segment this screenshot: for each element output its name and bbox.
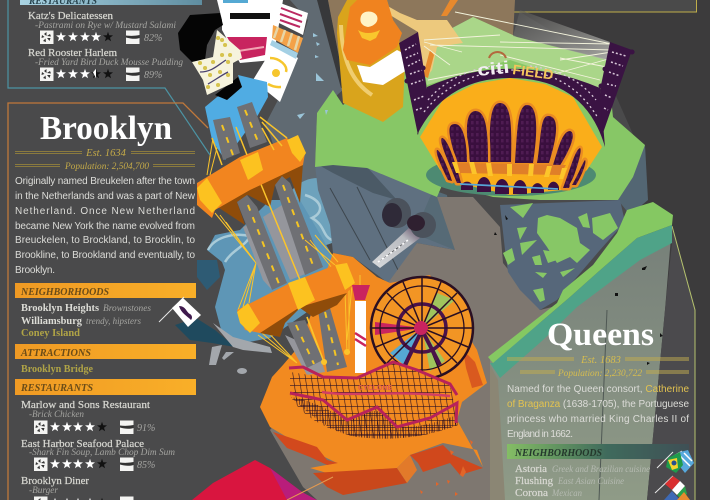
Queens history text: England in 1662. (507, 429, 573, 440)
icon: Mexico and other flags (664, 491, 690, 500)
Brooklyn history text: Originally named Breukelen after the town (15, 176, 195, 187)
illustration: orange figure with crown (343, 0, 407, 85)
neighborhoods list (515, 464, 650, 499)
Brooklyn history text: Brookline, to Brookland and eventually, to (15, 250, 195, 261)
icon: Italy flag (655, 476, 687, 499)
bridge upper tower (197, 135, 306, 218)
stadium roof band (417, 69, 605, 147)
stadium base (426, 154, 596, 196)
stadium right tower (600, 42, 632, 133)
illustration: rock speckles (494, 215, 663, 365)
illustration: blue-grey rock (315, 163, 455, 283)
Queens history text: Named for the Queen consort, Catherine (507, 384, 689, 395)
icon: Brazil and Greece flags (657, 450, 694, 473)
restaurant: Red Rooster Harlem (28, 48, 183, 81)
illustration: dark rock stripe (317, 0, 345, 88)
stadium facade (420, 78, 602, 195)
Queens history text (507, 384, 689, 440)
illustration: upper grey rock (265, 0, 345, 200)
stadium sign: citi (476, 58, 510, 80)
illustration: Citi Field stadium (399, 32, 632, 196)
illustration: Queens ridge teal (490, 225, 672, 378)
illustration: Cyclone roller coaster: CYCLONE (358, 385, 393, 392)
neighborhoods list: Flushing (515, 476, 554, 487)
illustration: green land mass (315, 17, 645, 200)
neighborhoods list: trendy, hipsters (86, 317, 141, 327)
section bar: neighborhoods (15, 283, 196, 298)
stadium arches (437, 103, 585, 188)
Queens history text: of Braganza (1638-1705), the Portuguese (507, 399, 689, 410)
illustration: Citi Field stadium: FIELD (512, 61, 554, 83)
illustration: Queens ridge green (488, 202, 673, 363)
restaurant: Brooklyn Diner (21, 476, 134, 500)
panel: Queens: NEIGHBORHOODS (514, 448, 602, 459)
neighborhoods list: Coney Island (21, 328, 80, 339)
panel: Queens (507, 317, 694, 500)
illustration: debris around coney island (420, 440, 473, 496)
attraction: Brooklyn Bridge: Brooklyn Bridge (21, 364, 93, 375)
Brooklyn history text (15, 176, 196, 276)
illustration: Queens lower ground (490, 225, 672, 500)
bridge middle roadway (237, 176, 323, 290)
Brooklyn history text: Brooklyn. (15, 265, 55, 276)
neighborhoods list: East Asian Cuisine (557, 477, 624, 487)
Queens history text: princess who married King Charles II of (507, 414, 689, 425)
panel: Brooklyn: RESTAURANTS (20, 383, 93, 394)
Queens title: Queens (547, 317, 654, 353)
illustration: red-pink hill (192, 460, 333, 500)
neighborhoods list: Mexican (551, 489, 582, 499)
restaurant: Red Rooster Harlem: -Fried Yard Bird Duck Mousse Pudding (35, 58, 183, 68)
illustration: orange cliff shadows (273, 350, 483, 495)
illustration: parachute jump tower (352, 275, 370, 373)
neighborhoods list: Brownstones (103, 304, 151, 314)
illustration: tan top land (328, 0, 515, 88)
illustration: Cyclone roller coaster (289, 362, 458, 439)
illustration: Queens tan sliver (490, 365, 505, 500)
illustration: figure with bearded face and papers (178, 0, 328, 165)
skyline roads (212, 102, 287, 165)
restaurant: Marlow and Sons: Marlow and Sons Restaurant (21, 400, 150, 411)
black hair (178, 13, 242, 100)
restaurant: East Harbor Seafood Palace: -Shark Fin Soup, Lamb Chop Dim Sum (29, 448, 175, 458)
illustration: cannon pipes (372, 198, 436, 268)
bridge lower roadway (285, 308, 347, 375)
neighborhoods list: Williamsburg (21, 316, 83, 327)
illustration: Queens dark side panel (647, 226, 695, 500)
restaurant: Katz's Delicatessen: 82% (144, 33, 162, 44)
established year (15, 148, 195, 166)
illustration: rocky green fragments (500, 200, 625, 310)
restaurant: Brooklyn Diner: -Burger (29, 486, 58, 496)
panel outline (8, 103, 208, 500)
Brooklyn title: Brooklyn (40, 110, 172, 147)
restaurant: Marlow and Sons: 91% (137, 423, 155, 434)
restaurant: East Harbor Seafood Palace: East Harbor Seafood Palace (21, 439, 144, 450)
stadium lower band (452, 162, 567, 194)
bridge lower tower (237, 263, 355, 337)
population: Population: 2,230,722 (557, 369, 642, 379)
illustration: Ferris wheel (371, 277, 473, 379)
illustration: light beams (424, 10, 612, 80)
blue debris (297, 33, 328, 119)
Brooklyn history text: became New York the name evolved from (15, 221, 195, 232)
restaurant: East Harbor Seafood Palace (21, 439, 175, 471)
restaurant: Katz's Delicatessen: Katz's Delicatessen (28, 11, 114, 22)
restaurant: Katz's Delicatessen (28, 11, 176, 44)
illustration: water and shoreline (175, 178, 352, 374)
neighborhoods list: Greek and Brazilian cuisine (552, 465, 650, 475)
panel: top-left restaurants (8, 0, 210, 155)
section bar: restaurants (20, 0, 202, 5)
panel: top right info box edge (513, 0, 696, 12)
illustration: lit green area (420, 17, 610, 90)
stadium tower lamps (407, 52, 632, 86)
illustration: Brooklyn Bridge (197, 135, 355, 375)
illustration: Queens panel lines (599, 310, 607, 500)
Brooklyn history text: in the Netherlands and was a part of New (15, 191, 196, 202)
restaurant: Red Rooster Harlem: 89% (144, 70, 162, 81)
Brooklyn history text: Netherland. Once New Netherland (15, 206, 195, 217)
restaurant: Marlow and Sons (21, 400, 155, 434)
panel: Brooklyn: ATTRACTIONS (20, 348, 91, 359)
icon: moustache flag (159, 297, 201, 327)
illustration: right panel border (672, 226, 695, 500)
section bar: neighborhoods (507, 444, 689, 459)
restaurant: Red Rooster Harlem: Red Rooster Harlem (28, 48, 117, 59)
blue shirt (205, 75, 268, 160)
dotted beard (192, 30, 242, 95)
bridge upper tower shadow (207, 163, 303, 225)
papers (217, 0, 308, 102)
established year: Est. 1634 (85, 148, 127, 159)
bridge suspender cables (207, 138, 352, 363)
neighborhoods list: Corona (515, 488, 548, 499)
Brooklyn history text: Breuckelen, to Brockland, to Brocklin, to (15, 235, 195, 246)
stadium left tower (399, 32, 427, 135)
restaurant: Katz's Delicatessen: -Pastrami on Rye w/ Mustard Salami (35, 21, 176, 31)
neighborhoods list: Brooklyn Heights (21, 303, 99, 314)
panel: Brooklyn (8, 103, 208, 500)
restaurant: East Harbor Seafood Palace: 85% (137, 460, 155, 471)
neighborhoods list (21, 303, 151, 339)
section bar: restaurants (15, 379, 196, 395)
illustration: tan land (270, 197, 560, 500)
illustration: rock beside stadium (618, 145, 648, 215)
restaurant: Marlow and Sons: -Brick Chicken (29, 410, 84, 420)
panel: Brooklyn: NEIGHBORHOODS (20, 287, 109, 298)
established year: Est. 1683 (580, 355, 621, 366)
established year (507, 355, 689, 373)
population: Population: 2,504,700 (64, 162, 149, 172)
neighborhoods list: Astoria (515, 464, 547, 475)
panel outline (8, 0, 210, 155)
section bar: attractions (15, 344, 196, 359)
illustration: blond hair and cape (337, 0, 463, 122)
dark right background (500, 0, 710, 500)
restaurant: Brooklyn Diner: Brooklyn Diner (21, 476, 90, 487)
illustration: Coney Island orange ground (260, 253, 487, 477)
